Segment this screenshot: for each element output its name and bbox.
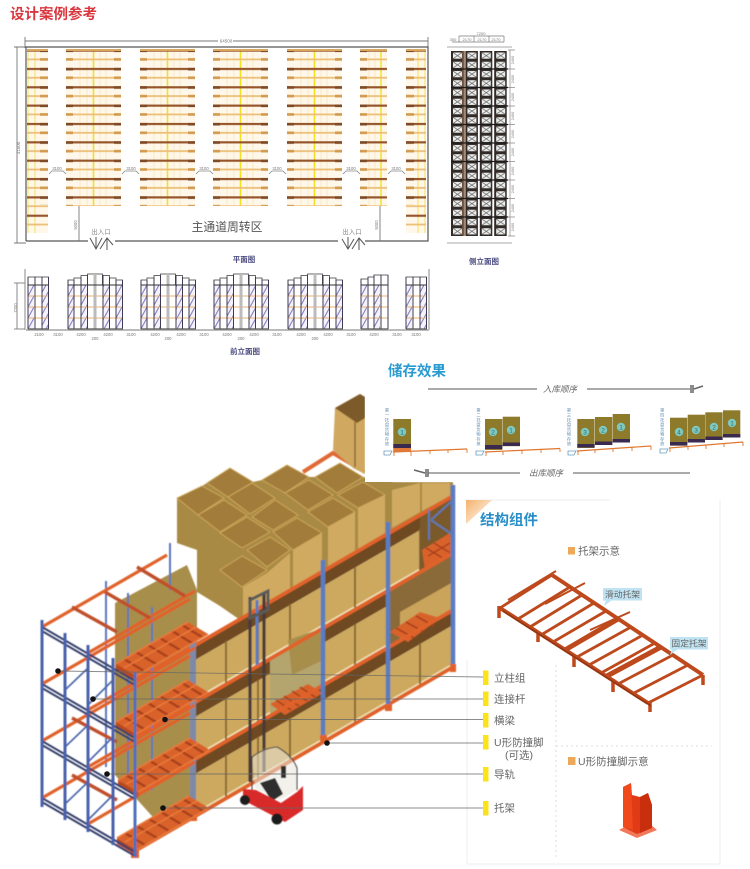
- level 1 boxes: [195, 553, 453, 759]
- fixed carrier callout: 固定托架: [671, 638, 707, 648]
- forklift cage: [252, 747, 297, 801]
- left rack front columns: [42, 620, 135, 857]
- structure panel background: [466, 500, 720, 864]
- forklift mast: [250, 591, 268, 782]
- panel: structure components: [466, 500, 720, 864]
- front elevation dimension labels: 3100: [411, 332, 421, 337]
- rack block 2: [66, 49, 121, 206]
- side elevation right dimensions: [508, 50, 515, 236]
- label: connecting rod: [483, 692, 526, 706]
- side elevation dimension labels: 350: [450, 37, 457, 42]
- aisle width dimensions: 3100: [126, 166, 136, 171]
- storage step 3: 3: [583, 430, 587, 436]
- front elevation dimension labels: 4200: [369, 332, 379, 337]
- aisle width dimensions: 3100: [52, 166, 62, 171]
- label: guide rail: 导轨: [494, 768, 515, 781]
- storage step 3: 第三托盘货物存放: [566, 407, 572, 447]
- front elevation dimension labels: 4200: [150, 332, 160, 337]
- right entrance and arrows: [342, 227, 365, 250]
- side elevation top dimensions: [452, 36, 504, 42]
- label: carrier: [483, 801, 515, 816]
- front elevation drawing: [13, 269, 429, 341]
- storage step 1: 第一托盘货物存放: [384, 407, 390, 447]
- side elevation dimension labels: 2170: [463, 37, 472, 42]
- storage step 2: [476, 407, 560, 456]
- aisle depth dimensions: 5000: [73, 220, 78, 230]
- carrier frame drawing: [499, 571, 703, 712]
- inbound order line: [428, 384, 703, 394]
- carrier pallets: [116, 622, 210, 856]
- sliding carrier callout: [603, 588, 642, 606]
- front elevation dimension labels: [34, 332, 421, 341]
- carrier legend: 托架示意: [578, 544, 620, 558]
- front height label: 7200: [13, 303, 18, 313]
- storage panel background: [365, 357, 750, 482]
- U-shaped guard legend: U形防撞脚示意: [578, 755, 649, 768]
- top box front faces: [243, 483, 450, 617]
- boxes behind left rack: [115, 565, 197, 825]
- rack block 7: [406, 49, 426, 233]
- label: U guard optional: U形防撞脚: [494, 736, 544, 749]
- side elevation dimension labels: 2170: [478, 37, 487, 42]
- panel: storage effect: [365, 357, 750, 482]
- right end bracing: [429, 500, 453, 540]
- plan overall width label: 64500: [220, 38, 233, 44]
- left rack back columns: [106, 543, 170, 790]
- side elevation drawing: [447, 31, 515, 243]
- structure heading: 结构组件: [480, 511, 538, 529]
- open slot with pallet upper right: [420, 496, 453, 572]
- storage step 4: 2: [712, 424, 716, 432]
- storage step 3: 2: [601, 428, 605, 434]
- outbound order line: [414, 468, 690, 478]
- front elevation dimension labels: 3100: [392, 332, 402, 337]
- storage step 3: [566, 407, 651, 455]
- front elevation dimension labels: 4200: [176, 332, 186, 337]
- main rack orange beams: [135, 496, 453, 851]
- carrier side rails: [500, 575, 703, 703]
- aisle width dimensions: 3100: [346, 166, 356, 171]
- storage step 2: 1: [509, 428, 513, 434]
- forklift wheels: [240, 795, 282, 824]
- storage step 3: 1: [619, 424, 623, 432]
- plan frame: [26, 47, 428, 241]
- aisle width dimensions: 3100: [272, 166, 282, 171]
- aisle width dimensions: 3100: [391, 166, 401, 171]
- level 0 boxes: [195, 610, 453, 816]
- carrier cross bars: [500, 575, 703, 703]
- side elevation right dimensions: 2400: [511, 75, 515, 83]
- left rack brown cross beams: [72, 567, 185, 800]
- left entrance and arrows: 出入口: [91, 227, 111, 236]
- label: guide rail: [483, 767, 515, 782]
- aisle width dimensions: 3100: [199, 166, 209, 171]
- front elevation dimension labels: 200: [312, 336, 319, 341]
- label: cross beam: [483, 713, 515, 728]
- plan dimension lines: [14, 37, 428, 243]
- side elevation right dimensions: 2400: [511, 56, 515, 64]
- front elevation dimension labels: 3100: [126, 332, 136, 337]
- left rack depth rails: [42, 555, 195, 824]
- front bay group 4: [214, 274, 269, 329]
- forklift: [240, 591, 303, 824]
- label: connecting rod: 连接杆: [494, 692, 526, 706]
- front elevation dimension labels: 4200: [103, 332, 113, 337]
- front bay group 2: [68, 274, 123, 329]
- front elevation dimension labels: 200: [92, 336, 99, 341]
- front bay group 7: [406, 277, 427, 329]
- storage step 4: 4: [677, 430, 681, 436]
- top box surfaces: [177, 463, 385, 587]
- side elevation right dimensions: 2400: [511, 112, 515, 120]
- orange corner accent: [466, 500, 492, 524]
- plan overall depth label: 31500: [16, 141, 21, 154]
- front bay group 3: [141, 274, 196, 329]
- leader lines with dots: [55, 668, 483, 811]
- left rack dark cross rails: [42, 627, 135, 856]
- front elevation dimension labels: 200: [164, 336, 172, 341]
- rack block 6: [360, 49, 387, 206]
- front elevation dimension labels: 200: [238, 336, 245, 341]
- storage step 4: 第四托盘货物存放: [659, 407, 665, 447]
- front elevation frame and dimensions: [14, 269, 429, 330]
- side elevation caption: 侧立面图: [469, 256, 499, 266]
- label: U guard optional: [483, 735, 544, 762]
- rack block 5: [287, 49, 342, 206]
- rack block 3: [140, 49, 195, 206]
- front bay group 6: [361, 275, 388, 329]
- side elevation right dimensions: 2400: [511, 148, 515, 156]
- main aisle label: 主通道周转区: [192, 220, 263, 234]
- front elevation dimension labels: 3100: [346, 332, 356, 337]
- storage step 1: 1: [400, 430, 404, 436]
- aisle width dimensions: [49, 166, 405, 174]
- front elevation dimension labels: 4200: [222, 332, 232, 337]
- label: carrier: 托架: [494, 802, 515, 814]
- front elevation dimension labels: 2100: [34, 332, 44, 337]
- sliding carrier callout: 滑动托架: [605, 588, 640, 600]
- open slot with pallet right: [388, 553, 453, 648]
- front bay group 5: [288, 274, 343, 329]
- left entrance and arrows: [90, 227, 113, 250]
- upper back box and beam: [303, 394, 365, 474]
- side elevation right dimensions: 2400: [511, 223, 515, 231]
- side elevation right dimensions: 2400: [511, 185, 515, 193]
- front elevation caption: 前立面图: [230, 346, 260, 356]
- storage step 1: [384, 407, 467, 456]
- title: 设计案例参考: [10, 5, 97, 23]
- side elevation dimension labels: 7200: [477, 31, 486, 36]
- front elevation dimension labels: 3100: [53, 332, 63, 337]
- front elevation dimension labels: 4200: [249, 332, 259, 337]
- aisle depth dimensions: 5000: [374, 220, 379, 230]
- rack block 1: [27, 49, 48, 233]
- carrier legs: [499, 606, 703, 712]
- outbound order line: 出库顺序: [529, 468, 564, 478]
- icon: U-shaped guard: [619, 783, 657, 838]
- label: U guard optional: (可选): [505, 748, 533, 762]
- right entrance and arrows: 出入口: [342, 227, 362, 236]
- side elevation dimension labels: [450, 31, 501, 42]
- rack block 4: [213, 49, 268, 206]
- forklift body: [243, 786, 303, 822]
- 3D rack illustration: [42, 394, 456, 858]
- front elevation dimension labels: 3100: [199, 332, 209, 337]
- front bay group 1: [28, 277, 49, 329]
- label: uprights: 立柱组: [494, 672, 526, 684]
- label: uprights: [483, 670, 526, 685]
- front elevation dimension labels: 4200: [296, 332, 306, 337]
- storage step 2: 2: [491, 430, 495, 436]
- main column feet: [131, 664, 456, 858]
- plan view caption: 平面图: [233, 255, 255, 264]
- front elevation dimension labels: 3100: [272, 332, 282, 337]
- storage step 4: [659, 407, 743, 453]
- fixed carrier callout: [670, 637, 708, 655]
- open slot with pallet centre: [270, 628, 323, 716]
- side elevation right dimensions: 2400: [511, 204, 515, 212]
- storage step 4: 3: [694, 428, 698, 434]
- front elevation dimension labels: 4200: [76, 332, 86, 337]
- label: cross beam: 横梁: [494, 714, 515, 727]
- aisle depth dimensions: [73, 206, 380, 241]
- main rack blue columns: [193, 485, 453, 818]
- side elevation right dimensions: 2400: [511, 93, 515, 101]
- level 2 boxes: [195, 496, 453, 702]
- front elevation dimension labels: 4200: [323, 332, 333, 337]
- storage step 4: 1: [730, 420, 734, 428]
- inbound order line: 入库顺序: [543, 384, 578, 394]
- side elevation dimension labels: 2170: [492, 37, 501, 42]
- component labels: [483, 670, 544, 816]
- plan view drawing: [14, 37, 428, 250]
- top level box mass: [177, 463, 453, 622]
- side elevation rack columns: [451, 51, 508, 236]
- side elevation right dimensions: 2400: [511, 167, 515, 175]
- side elevation right dimensions: 2400: [511, 130, 515, 138]
- storage effect heading: 储存效果: [388, 362, 446, 380]
- storage step 2: 第二托盘货物存放: [476, 407, 482, 447]
